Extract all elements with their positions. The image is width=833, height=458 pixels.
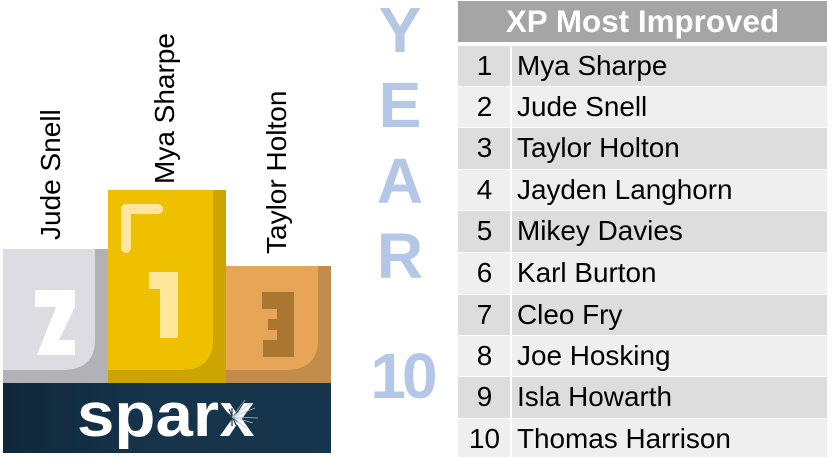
row 2: 2 xyxy=(477,91,492,122)
row 10: 10 xyxy=(469,423,500,454)
row 7: Cleo Fry xyxy=(517,299,622,330)
row 9 xyxy=(458,376,827,418)
row 6: Karl Burton xyxy=(517,257,657,288)
row 4 xyxy=(458,169,827,211)
number 10: 10 xyxy=(370,340,434,412)
row 8 xyxy=(458,335,827,377)
numeral 2 xyxy=(35,290,75,355)
table header: XP Most Improved xyxy=(506,4,779,39)
row 5 xyxy=(458,210,827,252)
row 1 xyxy=(458,45,827,87)
row 9: 9 xyxy=(477,381,492,412)
table header xyxy=(458,1,827,42)
label: Mya Sharpe: Mya Sharpe xyxy=(149,33,180,184)
row 3 xyxy=(458,127,827,169)
row 3: Taylor Holton xyxy=(517,132,680,163)
letter R: R xyxy=(377,220,423,292)
row 2: Jude Snell xyxy=(517,91,647,122)
row 3: 3 xyxy=(477,132,492,163)
podium illustration xyxy=(3,33,331,453)
logo text: spar xyxy=(77,381,219,450)
podium: second place xyxy=(3,249,108,383)
row 4: Jayden Langhorn xyxy=(517,174,733,205)
logo x: x xyxy=(220,381,255,450)
letter A: A xyxy=(377,145,423,217)
label: Taylor Holton: Taylor Holton xyxy=(261,91,292,254)
row 2 xyxy=(458,86,827,128)
podium: third place xyxy=(226,266,331,383)
base with sparx logo xyxy=(3,381,331,453)
podium: first place xyxy=(108,190,226,383)
row 5: Mikey Davies xyxy=(517,215,683,246)
vertical heading: YEAR 10 xyxy=(370,0,435,412)
letter E: E xyxy=(379,69,421,141)
label: Jude Snell: Jude Snell xyxy=(35,109,66,240)
row 5: 5 xyxy=(477,215,492,246)
row 7 xyxy=(458,294,827,336)
row 9: Isla Howarth xyxy=(517,381,672,412)
row 1: Mya Sharpe xyxy=(517,50,667,81)
row 4: 4 xyxy=(477,174,492,205)
row 8: Joe Hosking xyxy=(517,340,670,371)
row 1: 1 xyxy=(477,50,492,81)
row 7: 7 xyxy=(477,299,492,330)
numeral 1 xyxy=(149,272,178,338)
row 10 xyxy=(458,418,827,457)
numeral 3 xyxy=(262,292,294,357)
row 6: 6 xyxy=(477,257,492,288)
logo spark xyxy=(226,400,258,429)
row 10: Thomas Harrison xyxy=(517,423,731,454)
row 8: 8 xyxy=(477,340,492,371)
row 6 xyxy=(458,252,827,294)
highlight corner xyxy=(126,209,158,248)
